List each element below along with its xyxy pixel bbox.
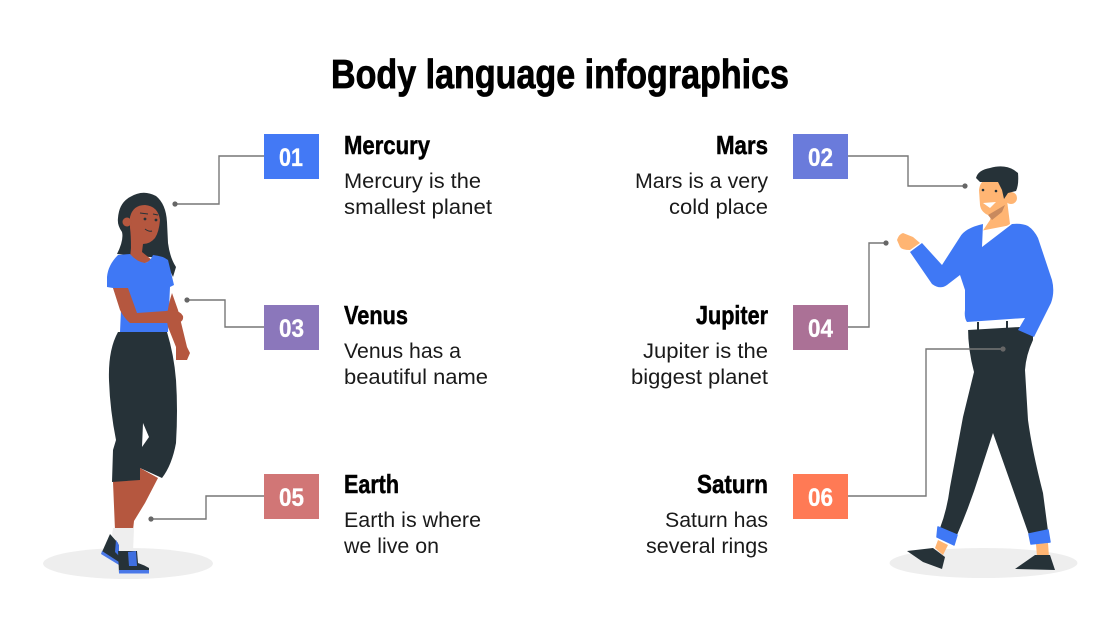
item 04: Jupiter: 04	[808, 315, 833, 343]
item 05: Earth	[264, 469, 481, 558]
item 01: Mercury: smallest planet	[344, 196, 492, 219]
item 05: Earth: Earth is where	[344, 509, 481, 532]
item 03: Venus	[264, 300, 488, 389]
item 03: Venus: Venus	[344, 300, 408, 330]
item 06: Saturn: Saturn has	[665, 509, 768, 532]
connector and marker 04	[848, 240, 889, 327]
item 02: Mars: Mars is a very	[635, 170, 769, 193]
item 02: Mars: 02	[808, 144, 833, 172]
item 04: Jupiter: Jupiter	[696, 300, 768, 330]
item 04: Jupiter: biggest planet	[631, 366, 768, 389]
connector and marker 02	[848, 156, 968, 189]
item 03: Venus: beautiful name	[344, 366, 488, 389]
item 05: Earth: 05	[279, 484, 304, 512]
item 03: Venus: Venus has a	[344, 340, 461, 363]
item 03: Venus: 03	[279, 315, 304, 343]
item 05: Earth: Earth	[344, 469, 399, 499]
item 04: Jupiter	[631, 300, 848, 389]
connector and marker 03	[184, 297, 264, 327]
item 01: Mercury: Mercury is the	[344, 170, 481, 193]
item 01: Mercury: 01	[279, 144, 303, 172]
item 04: Jupiter: Jupiter is the	[643, 340, 768, 363]
item 01: Mercury: Mercury	[344, 130, 430, 160]
illustration: man	[890, 166, 1078, 578]
item 01: Mercury	[264, 130, 492, 219]
item 06: Saturn	[646, 469, 848, 558]
connector and marker 06	[848, 346, 1006, 496]
item 06: Saturn: Saturn	[697, 469, 768, 499]
item 02: Mars	[635, 130, 848, 219]
item 02: Mars: Mars	[716, 130, 768, 160]
item 02: Mars: cold place	[669, 196, 768, 219]
connector and marker 05	[148, 496, 264, 522]
item 06: Saturn: several rings	[646, 535, 768, 558]
illustration: woman	[43, 193, 213, 579]
item 05: Earth: we live on	[343, 535, 439, 558]
item 06: Saturn: 06	[808, 484, 833, 512]
title: Body language infographics	[331, 51, 789, 97]
connector and marker 01	[172, 156, 264, 207]
